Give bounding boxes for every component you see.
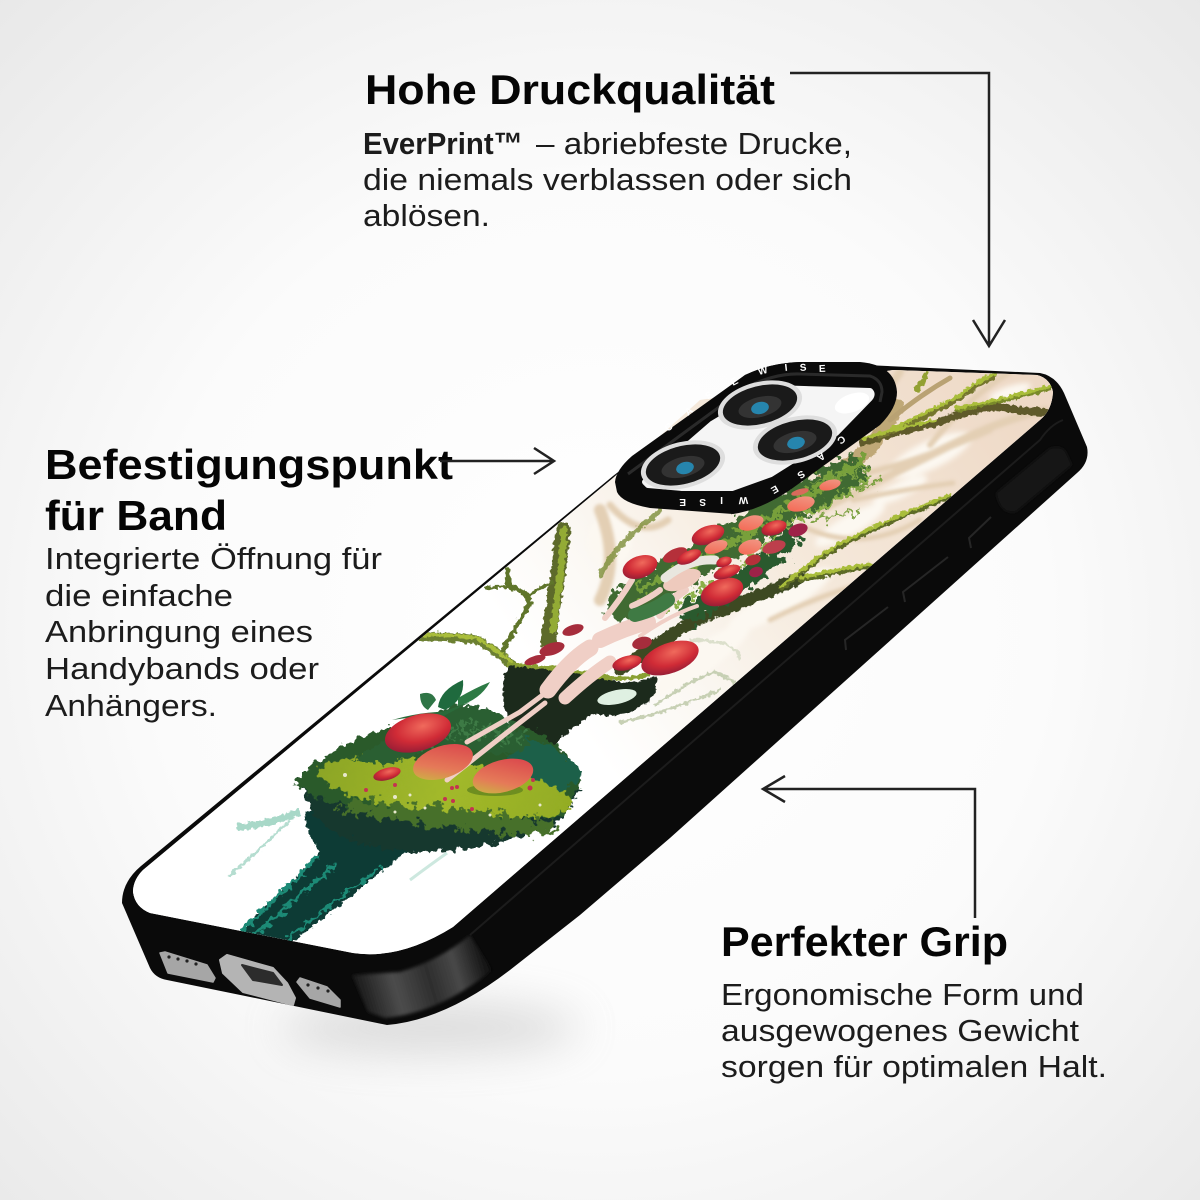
body text — [363, 126, 852, 233]
callout: Hohe Druckqualität — [363, 66, 852, 233]
mossy branches — [423, 373, 1050, 673]
hair and face — [663, 568, 701, 592]
body text: Ergonomische Form und — [721, 977, 1084, 1012]
camera module — [615, 362, 897, 514]
floating island — [293, 704, 582, 852]
heading: Befestigungspunkt — [45, 441, 453, 488]
heading: Perfekter Grip — [721, 918, 1008, 965]
camera window — [645, 388, 872, 488]
lens top — [713, 372, 807, 438]
shadows and berries — [467, 786, 523, 796]
body text: Handybands oder — [45, 651, 319, 686]
pale low branches — [620, 640, 740, 722]
body text: die niemals verblassen oder sich — [363, 162, 852, 197]
body text: – abriebfeste Drucke, — [536, 126, 852, 161]
flash — [832, 388, 872, 418]
arrow: band attachment — [440, 448, 554, 474]
corner sheen — [352, 935, 492, 1018]
arrow: print quality — [790, 73, 1005, 346]
camera ring — [615, 362, 897, 514]
body text — [721, 977, 1107, 1084]
phone shadow — [280, 1004, 580, 1052]
side buttons — [845, 517, 991, 650]
case body — [122, 362, 1088, 1025]
body text: Anbringung eines — [45, 614, 313, 649]
lens left — [636, 432, 730, 498]
heading — [45, 441, 453, 539]
arrow: grip — [763, 776, 975, 918]
side rim highlight — [470, 420, 1063, 935]
ring brand text bottom: ESIWESAC — [679, 433, 847, 507]
ring brand text top: CASEWISE — [663, 363, 826, 434]
moss highlights — [423, 375, 1050, 671]
ring lip — [628, 374, 882, 474]
apples — [372, 477, 842, 799]
body text: EverPrint™ — [363, 126, 523, 161]
figure — [447, 560, 715, 780]
dress — [635, 600, 668, 615]
printed artwork — [133, 370, 1053, 954]
body text: Anhängers. — [45, 688, 217, 723]
body text: Integrierte Öffnung für — [45, 541, 382, 576]
body text — [45, 541, 382, 723]
body text: ablösen. — [363, 198, 490, 233]
big tan branch — [823, 407, 897, 482]
callout: Befestigungspunkt — [45, 441, 453, 723]
lens right — [748, 407, 842, 473]
loop opening — [597, 689, 637, 705]
heading: Hohe Druckqualität — [365, 66, 775, 113]
body text: sorgen für optimalen Halt. — [721, 1049, 1107, 1084]
body text: ausgewogenes Gewicht — [721, 1013, 1079, 1048]
heading: für Band — [45, 492, 227, 539]
foliage cluster — [625, 462, 880, 612]
trunk and roots — [228, 664, 656, 942]
white mist patches — [731, 381, 1032, 638]
phone with case — [100, 340, 1100, 1025]
bottom ports — [160, 952, 340, 1007]
band attachment recess — [996, 447, 1072, 512]
body text: die einfache — [45, 578, 233, 613]
callout: Perfekter Grip — [721, 918, 1107, 1084]
leaves — [392, 680, 490, 720]
pale background branches — [600, 372, 1045, 620]
